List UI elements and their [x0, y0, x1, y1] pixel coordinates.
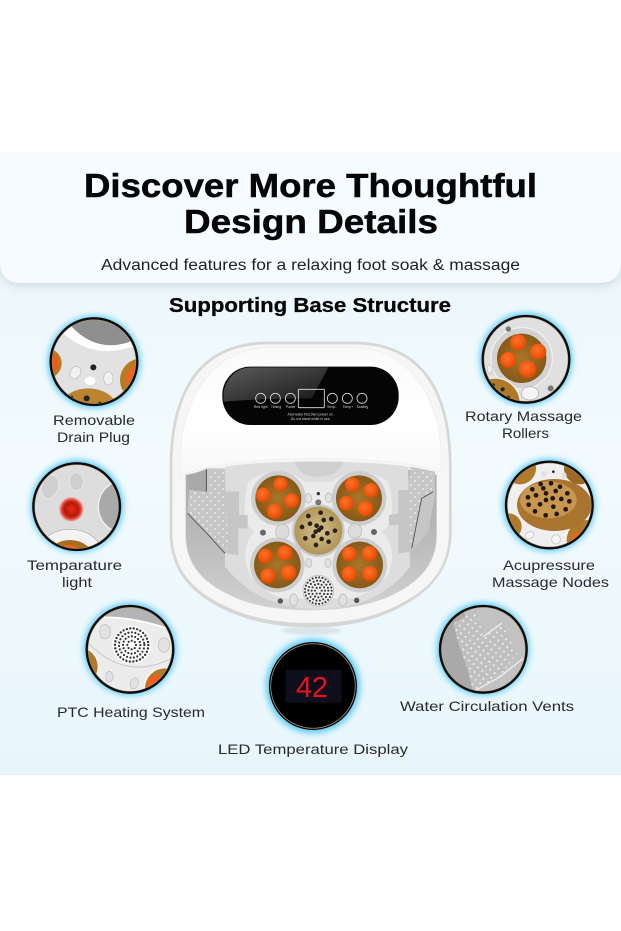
section heading: Supporting Base Structure [169, 295, 451, 317]
massage plate [225, 462, 410, 609]
control panel [222, 367, 399, 425]
subtitle: Advanced features for a relaxing foot soak & massage [101, 257, 520, 274]
button labels: Red light [254, 405, 268, 409]
basin well [186, 466, 437, 610]
touch buttons [256, 393, 367, 403]
label: Water Circulation Vents [400, 698, 574, 714]
callout: acupressure massage nodes [492, 452, 609, 590]
inset: drain plug [50, 317, 138, 406]
plate details [260, 492, 377, 606]
label: Rotary Massage [465, 408, 582, 424]
title line 1: Discover More Thoughtful [84, 167, 537, 204]
device shadow [282, 627, 342, 635]
safety note [288, 413, 334, 421]
callout: LED temperature display [218, 639, 408, 757]
label: Massage Nodes [492, 574, 609, 590]
device body [170, 342, 452, 627]
inset: rollers [482, 314, 570, 404]
safety note: Add water first,then power on. [288, 413, 334, 417]
display window [298, 389, 324, 408]
button labels: Scaling [357, 405, 368, 409]
button labels: Power [286, 405, 296, 409]
label: Removable [53, 412, 135, 428]
label [53, 412, 135, 445]
safety note: Do not stand while in use. [291, 417, 331, 421]
callout: PTC heating system [57, 603, 205, 720]
label: Acupressure [503, 557, 595, 573]
callout: removable drain plug [43, 311, 145, 445]
callout: rotary massage rollers [465, 313, 582, 441]
panel: header [0, 155, 621, 286]
roller: bottom left [250, 538, 305, 592]
lid [180, 348, 441, 476]
title line 2: Design Details [184, 203, 438, 240]
inset: red light [32, 462, 122, 552]
label: light [62, 574, 92, 590]
acupressure disc [292, 504, 345, 557]
inset: nodes [504, 460, 594, 550]
inset: grille [86, 604, 174, 694]
roller: top left [251, 471, 306, 526]
callout: temperature light [26, 455, 128, 590]
callout: water circulation vents [400, 603, 574, 714]
inset: LED readout [269, 642, 357, 730]
label [492, 557, 609, 590]
label: LED Temperature Display [218, 741, 408, 757]
button labels [254, 405, 368, 409]
button labels: Temp- [327, 405, 337, 409]
right vent panel [389, 467, 435, 553]
product: foot spa [170, 342, 452, 635]
page background [0, 155, 621, 775]
label: Temparature [27, 557, 122, 573]
temperature value: 42 [296, 672, 328, 704]
left vent panel [188, 468, 248, 555]
hump under lid [295, 462, 343, 477]
roller: bottom right [332, 538, 387, 592]
button labels: Temp+ [343, 405, 353, 409]
label [27, 557, 122, 590]
label: Rollers [502, 425, 549, 441]
heating grille [303, 575, 334, 606]
button labels: Timing [271, 405, 281, 409]
label: PTC Heating System [57, 704, 205, 720]
inset: vents [438, 605, 528, 695]
label [465, 408, 582, 441]
roller: top right [332, 471, 386, 526]
label: Drain Plug [57, 429, 130, 445]
